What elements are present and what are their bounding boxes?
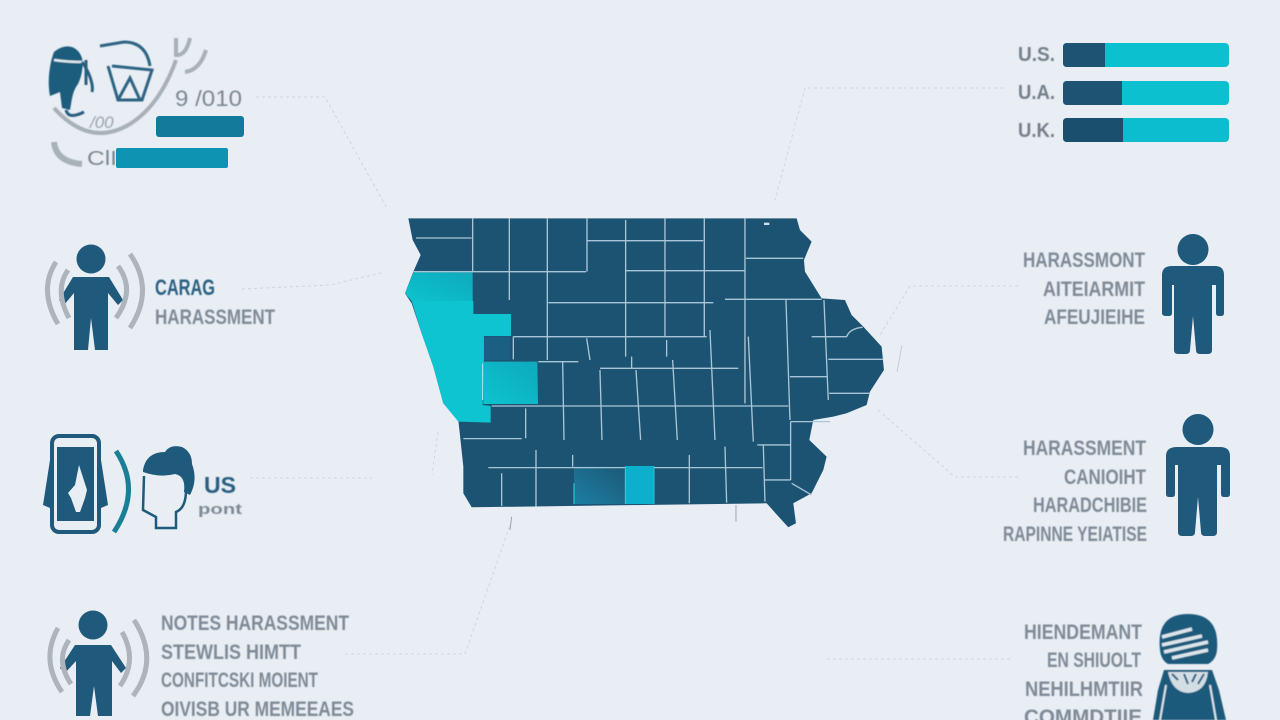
text block: CONFITCSKI MOIENT bbox=[161, 669, 318, 692]
label: heading: US bbox=[204, 472, 236, 498]
text block bbox=[161, 612, 354, 720]
icon: person bbox=[1166, 414, 1230, 536]
text block bbox=[1023, 249, 1145, 329]
label: stat value: 9 /010 bbox=[175, 86, 242, 111]
panel: top left statistics bbox=[49, 38, 244, 170]
bar: second stat bbox=[116, 148, 228, 168]
icon: signal arc bbox=[114, 451, 129, 532]
icon: person with signal waves bbox=[47, 244, 142, 350]
panel: bottom left person bbox=[50, 610, 354, 720]
panel: right lower person bbox=[1003, 414, 1230, 546]
text block: AFEUJIEIHE bbox=[1044, 306, 1145, 329]
icon: person bbox=[1162, 234, 1224, 354]
bar: first stat bbox=[156, 116, 244, 137]
text block: HARASSMENT bbox=[1023, 437, 1146, 460]
text block: AITEIARMIT bbox=[1043, 278, 1145, 301]
label: heading: CARAG bbox=[155, 275, 215, 300]
text block: STEWLIS HIMTT bbox=[161, 641, 301, 664]
text block: EN SHIUOLT bbox=[1047, 649, 1141, 672]
icon: phone bbox=[43, 436, 108, 532]
panel: top right comparison bars bbox=[1018, 43, 1229, 142]
label: bar three: U.K. bbox=[1018, 120, 1055, 142]
text block: HARASSMONT bbox=[1023, 249, 1145, 272]
panel: left middle person bbox=[47, 244, 275, 350]
label: bar two: U.A. bbox=[1018, 82, 1055, 104]
icon: head with hair bbox=[143, 446, 195, 528]
text block bbox=[1003, 437, 1147, 546]
map: Iowa counties bbox=[405, 218, 884, 530]
icon: medical scene bbox=[49, 38, 206, 164]
icon: person with covered face bbox=[1153, 614, 1226, 720]
bar three bbox=[1063, 118, 1229, 142]
label: small figure: /00 bbox=[89, 113, 114, 132]
bar one bbox=[1063, 43, 1229, 67]
text block bbox=[1024, 621, 1143, 720]
text block: HARADCHIBIE bbox=[1033, 494, 1147, 517]
connector lines bbox=[242, 88, 1018, 659]
label: second stat: ClI bbox=[87, 148, 117, 170]
label: bar one: U.S. bbox=[1018, 44, 1055, 66]
map: highlighted southern counties bbox=[574, 466, 653, 504]
map: highlighted western counties bbox=[405, 272, 538, 423]
label: subheading: pont bbox=[198, 501, 242, 518]
panel: bottom right person bbox=[1024, 614, 1226, 720]
icon: person with signal waves bbox=[50, 610, 147, 716]
bar two bbox=[1063, 81, 1229, 105]
icon: east map tick marks bbox=[897, 345, 902, 372]
text block: NEHILHMTIIR bbox=[1025, 678, 1143, 701]
text block: RAPINNE YEIATISE bbox=[1003, 523, 1147, 546]
text block: NOTES HARASSMENT bbox=[161, 612, 349, 635]
panel: left phone and user bbox=[43, 436, 242, 532]
label: subheading: HARASSMENT bbox=[155, 306, 275, 329]
map: county borders bbox=[413, 218, 883, 507]
text block: CANIOIHT bbox=[1064, 466, 1146, 489]
text block: HIENDEMANT bbox=[1024, 621, 1142, 644]
panel: right upper person bbox=[1023, 234, 1224, 354]
